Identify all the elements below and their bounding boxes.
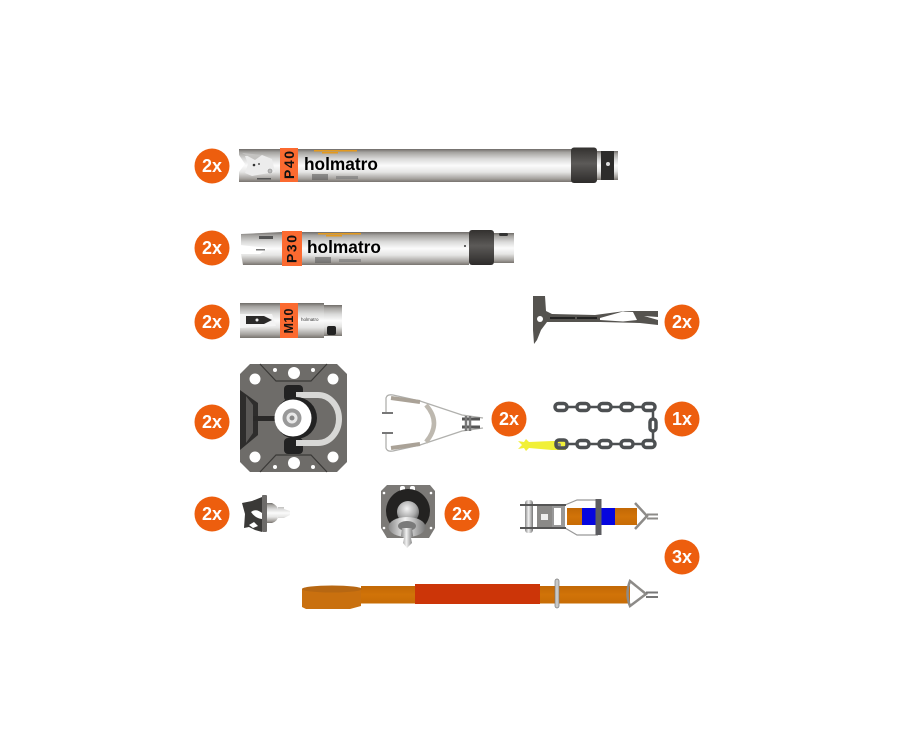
badge: 2x eye fitting bbox=[194, 496, 230, 532]
cylinder P30: P30 bbox=[284, 235, 300, 263]
badge: 2x ball plate: 2x bbox=[452, 504, 472, 524]
badge: 2x M10: 2x bbox=[202, 312, 222, 332]
badge: 2x M10 bbox=[194, 304, 230, 340]
long strap with roll bbox=[302, 579, 658, 609]
cylinder P40: holmatro bbox=[304, 154, 378, 174]
badge: 3x straps: 3x bbox=[672, 547, 692, 567]
cylinder M10: holmatro bbox=[301, 317, 319, 322]
badge: 2x P30 bbox=[194, 230, 230, 266]
badge: 2x P40: 2x bbox=[202, 156, 222, 176]
badge: 2x plate: 2x bbox=[202, 412, 222, 432]
badge: 2x P40 bbox=[194, 148, 230, 184]
icon: hammer bbox=[533, 296, 658, 344]
badge: 3x straps bbox=[664, 540, 700, 574]
swivel plate with D-ring bbox=[240, 364, 347, 472]
badge: 2x ball plate bbox=[444, 496, 480, 532]
cylinder P40: P40 bbox=[281, 151, 297, 179]
badge: 2x eye fitting: 2x bbox=[202, 504, 222, 524]
cylinder M10 bbox=[240, 303, 342, 338]
badge: 1x chain bbox=[664, 402, 700, 436]
chain with yellow hook bbox=[518, 404, 656, 451]
cylinder P30 bbox=[240, 230, 514, 266]
badge: 2x hammer bbox=[664, 304, 700, 340]
cylinder M10: M10 bbox=[282, 308, 296, 334]
badge: 2x plate bbox=[194, 404, 230, 440]
badge: 2x hammer: 2x bbox=[672, 312, 692, 332]
cylinder P40 bbox=[239, 148, 618, 183]
plate with ball fitting bbox=[381, 485, 435, 548]
badge: 2x bracket bbox=[492, 402, 526, 436]
cylinder P30: holmatro bbox=[307, 237, 381, 257]
Y-shaped bracket bbox=[382, 395, 483, 451]
ratchet strap bbox=[520, 499, 658, 535]
badge: 2x bracket: 2x bbox=[499, 409, 519, 429]
badge: 1x chain: 1x bbox=[672, 409, 692, 429]
badge: 2x P30: 2x bbox=[202, 238, 222, 258]
swivel eye fitting bbox=[242, 495, 290, 532]
